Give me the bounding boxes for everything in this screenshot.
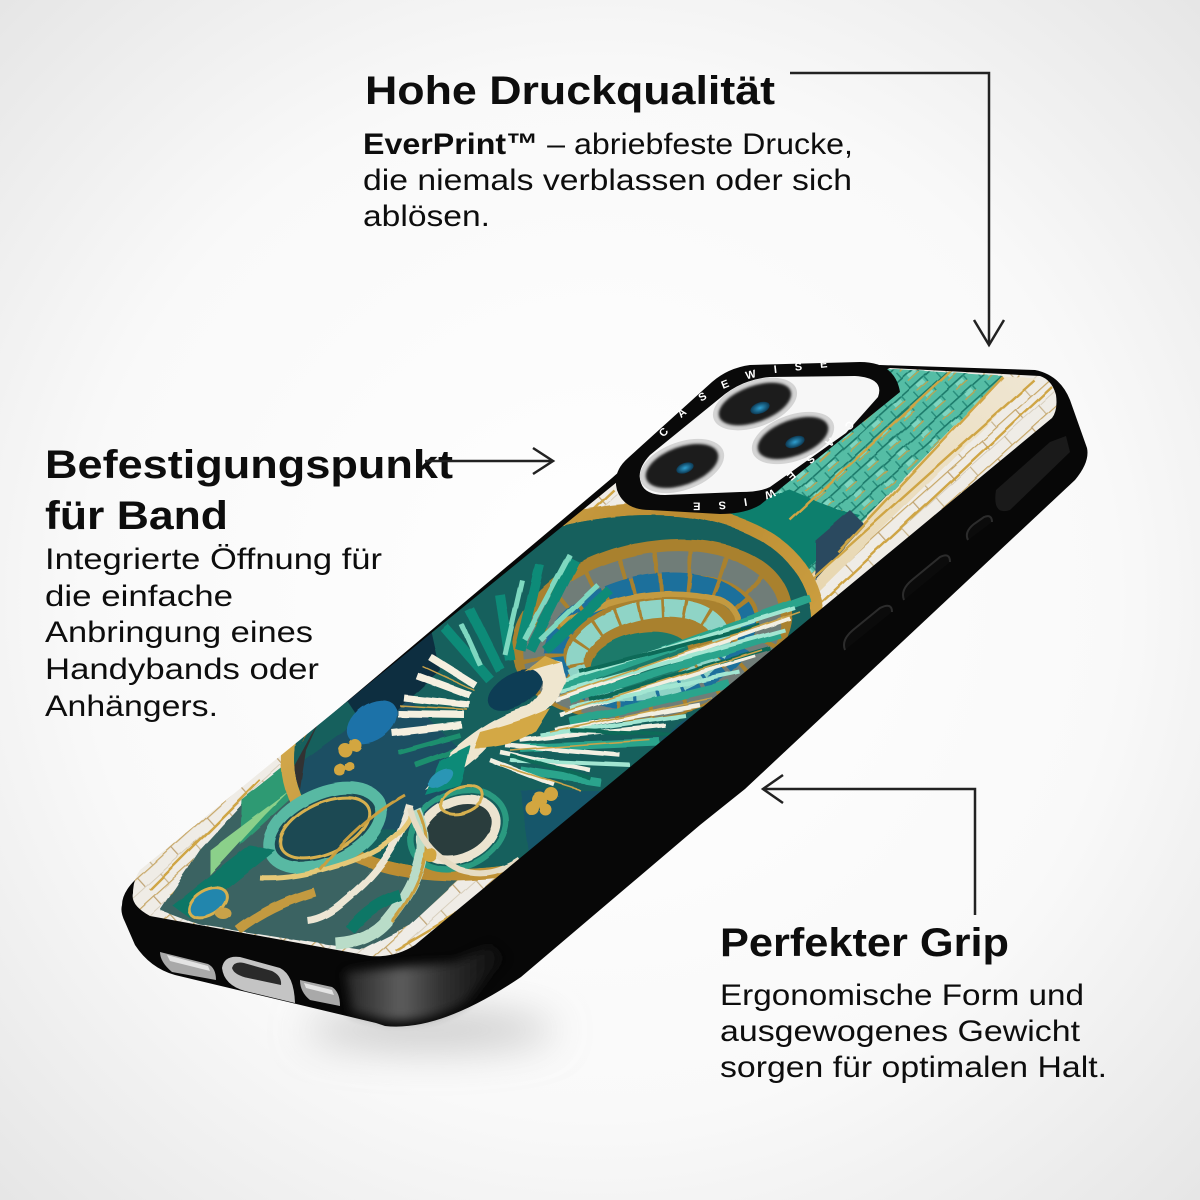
heading: für Band <box>45 494 228 538</box>
arrow: lanyard attachment <box>425 448 553 474</box>
heading: Befestigungspunkt <box>45 443 453 487</box>
dark lower panels <box>294 702 464 830</box>
brand ring text <box>660 363 854 510</box>
callout: grip <box>720 921 1107 1084</box>
description: Anbringung eines <box>45 616 313 649</box>
description: Integrierte Öffnung für <box>45 543 382 576</box>
description: ausgewogenes Gewicht <box>720 1015 1081 1048</box>
lower panels <box>172 845 275 925</box>
brand ring text: CASEWISE <box>694 424 854 510</box>
heading: Perfekter Grip <box>720 921 1009 965</box>
printed face artwork <box>132 368 1056 956</box>
phone case <box>121 362 1088 1028</box>
lens: top <box>706 367 804 441</box>
description: die niemals verblassen oder sich <box>363 164 852 197</box>
phoenix tail swirls <box>238 772 520 944</box>
gold flower clusters <box>334 739 559 862</box>
camera plate <box>640 376 879 495</box>
heading <box>45 443 453 538</box>
description: Ergonomische Form und <box>720 979 1084 1012</box>
long gold lines <box>150 372 1052 950</box>
lens: left <box>632 428 732 504</box>
medallion interior <box>294 514 811 869</box>
description <box>720 979 1107 1084</box>
description: ablösen. <box>363 200 490 233</box>
upper left teal band <box>520 510 720 620</box>
concentric mosaic rings <box>512 539 792 722</box>
island bezel <box>616 362 900 514</box>
description: die einfache <box>45 580 233 613</box>
callout: lanyard attachment <box>45 443 453 723</box>
description <box>45 543 382 723</box>
cream stripe <box>812 376 1036 591</box>
side buttons <box>844 436 1070 650</box>
phone drop shadow <box>305 1010 555 1050</box>
bottom edge sheen <box>345 945 505 1021</box>
lower panel <box>160 789 458 950</box>
phoenix right wing <box>490 598 810 790</box>
description: Anhängers. <box>45 690 218 723</box>
description: EverPrint™ – abriebfeste Drucke, <box>363 128 853 161</box>
gold corner fills <box>300 734 307 744</box>
phoenix body <box>425 656 566 795</box>
description: sorgen für optimalen Halt. <box>720 1051 1107 1084</box>
lens: right <box>745 402 841 474</box>
heading: Hohe Druckqualität <box>365 69 775 113</box>
camera island <box>616 362 900 514</box>
dark teal panel <box>730 490 860 568</box>
arrow: print quality to case <box>790 73 1004 345</box>
description: Handybands oder <box>45 653 319 686</box>
case body <box>121 365 1087 1027</box>
brand ring text: CASEWISE <box>660 363 828 436</box>
phoenix left wing <box>392 555 610 765</box>
arrow: grip <box>763 775 975 915</box>
charging port and speakers <box>160 952 340 1006</box>
callout: print quality <box>363 69 853 233</box>
teal brick stripe <box>772 368 1003 574</box>
gold medallion disc <box>280 504 823 882</box>
description <box>363 128 853 233</box>
